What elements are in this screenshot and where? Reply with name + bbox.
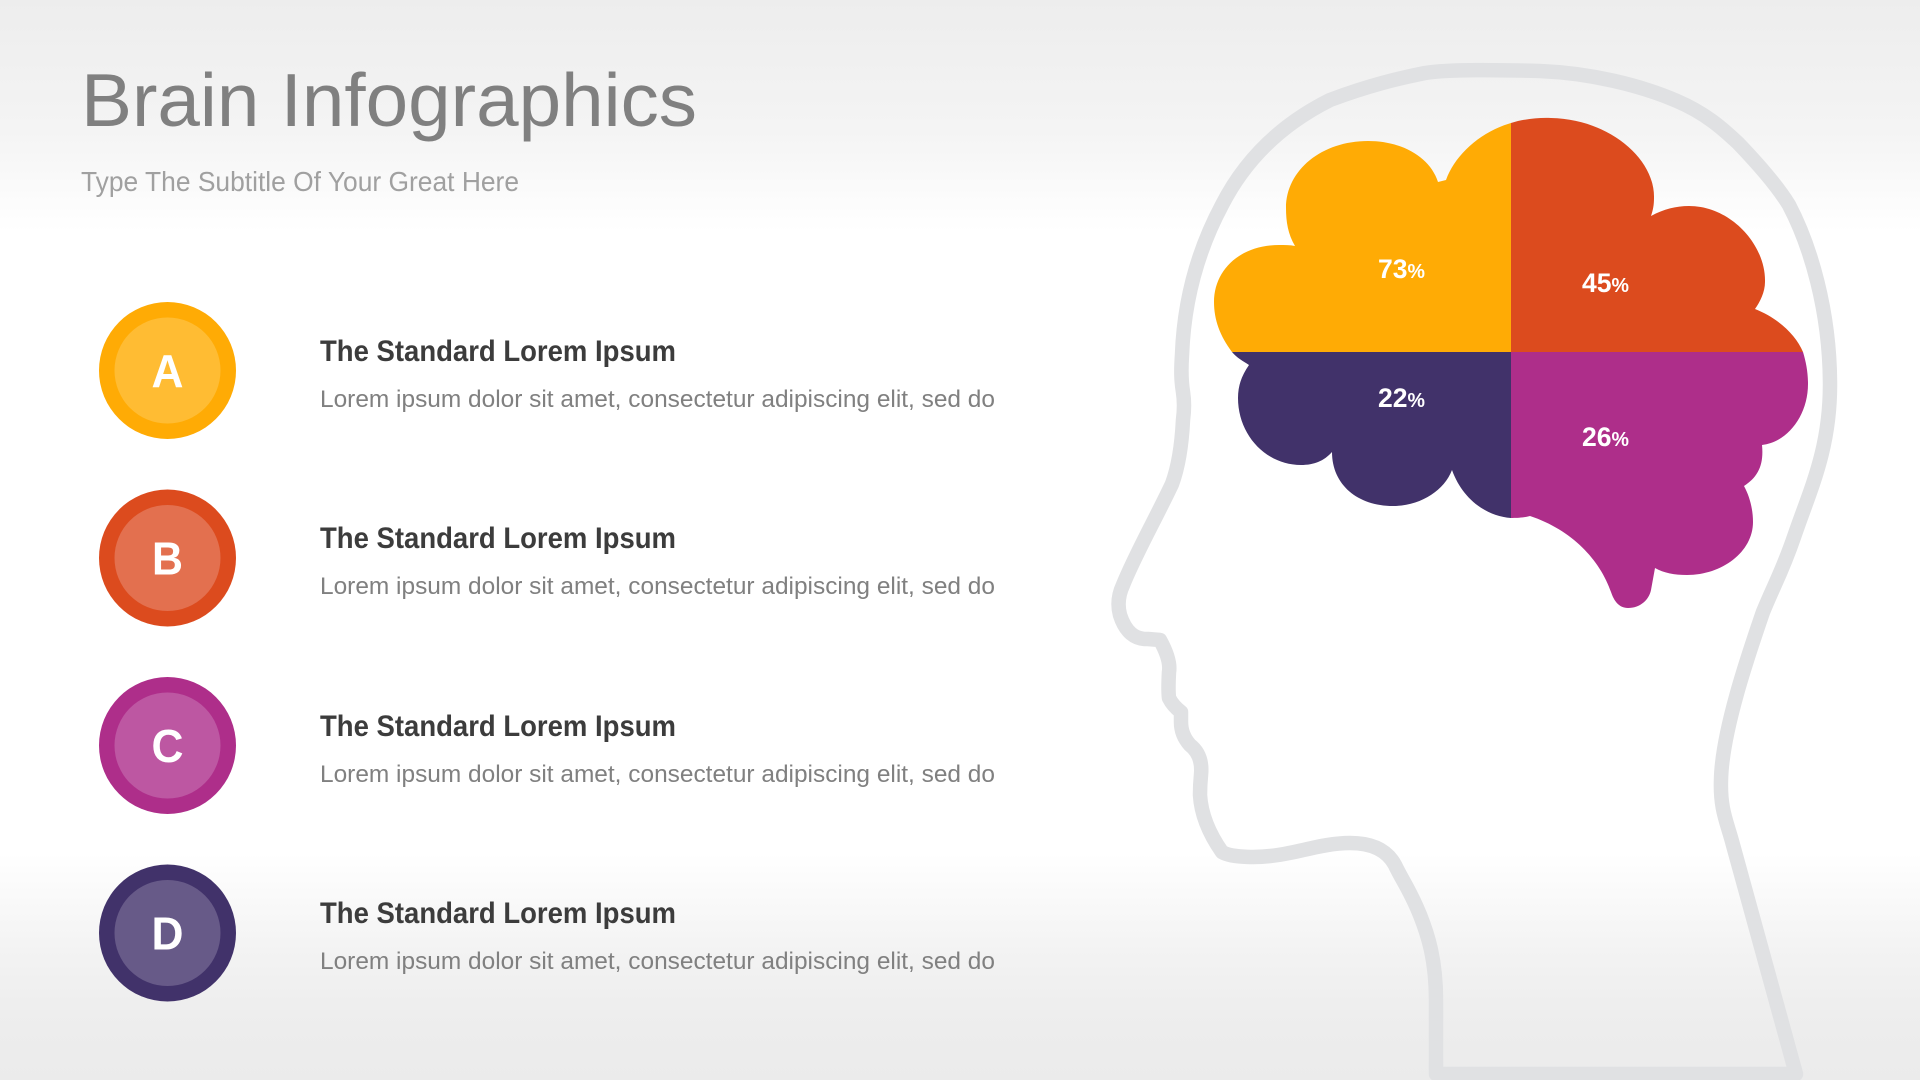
icon: badge C: C [152,720,184,772]
icon: badge A [99,302,236,439]
item A [99,302,995,439]
brain segment: indigo 22%: 22% [1378,383,1425,413]
icon: badge D: D [152,908,184,960]
brain segment: indigo 22% [1232,352,1511,518]
icon: badge B [99,490,236,626]
brain segment: orange 73% [1214,123,1511,352]
text C: Lorem ipsum dolor sit amet, consectetur adipiscing elit, sed do [320,761,995,788]
heading A: The Standard Lorem Ipsum [320,335,676,368]
brain segment: purple 26% [1511,352,1808,608]
icon: badge B: B [152,532,183,584]
brain segment: red 45% [1511,118,1803,352]
brain segment: orange 73%: 73% [1378,254,1425,284]
heading B: The Standard Lorem Ipsum [320,522,676,555]
brain segment: purple 26%: 26% [1582,422,1629,452]
head outline [1119,70,1830,1074]
title: Brain Infographics [81,58,697,142]
item B [99,490,995,626]
text D: Lorem ipsum dolor sit amet, consectetur adipiscing elit, sed do [320,948,995,975]
item C [99,677,995,814]
text A: Lorem ipsum dolor sit amet, consectetur adipiscing elit, sed do [320,386,995,413]
subtitle: Type The Subtitle Of Your Great Here [81,166,519,197]
icon: badge D [99,864,236,1002]
icon: badge A: A [152,345,184,397]
heading D: The Standard Lorem Ipsum [320,897,676,930]
icon: badge C [99,677,236,814]
item D [99,864,995,1002]
text B: Lorem ipsum dolor sit amet, consectetur adipiscing elit, sed do [320,573,995,600]
brain chart [1214,118,1808,608]
heading C: The Standard Lorem Ipsum [320,710,676,743]
brain segment: red 45%: 45% [1582,268,1629,298]
